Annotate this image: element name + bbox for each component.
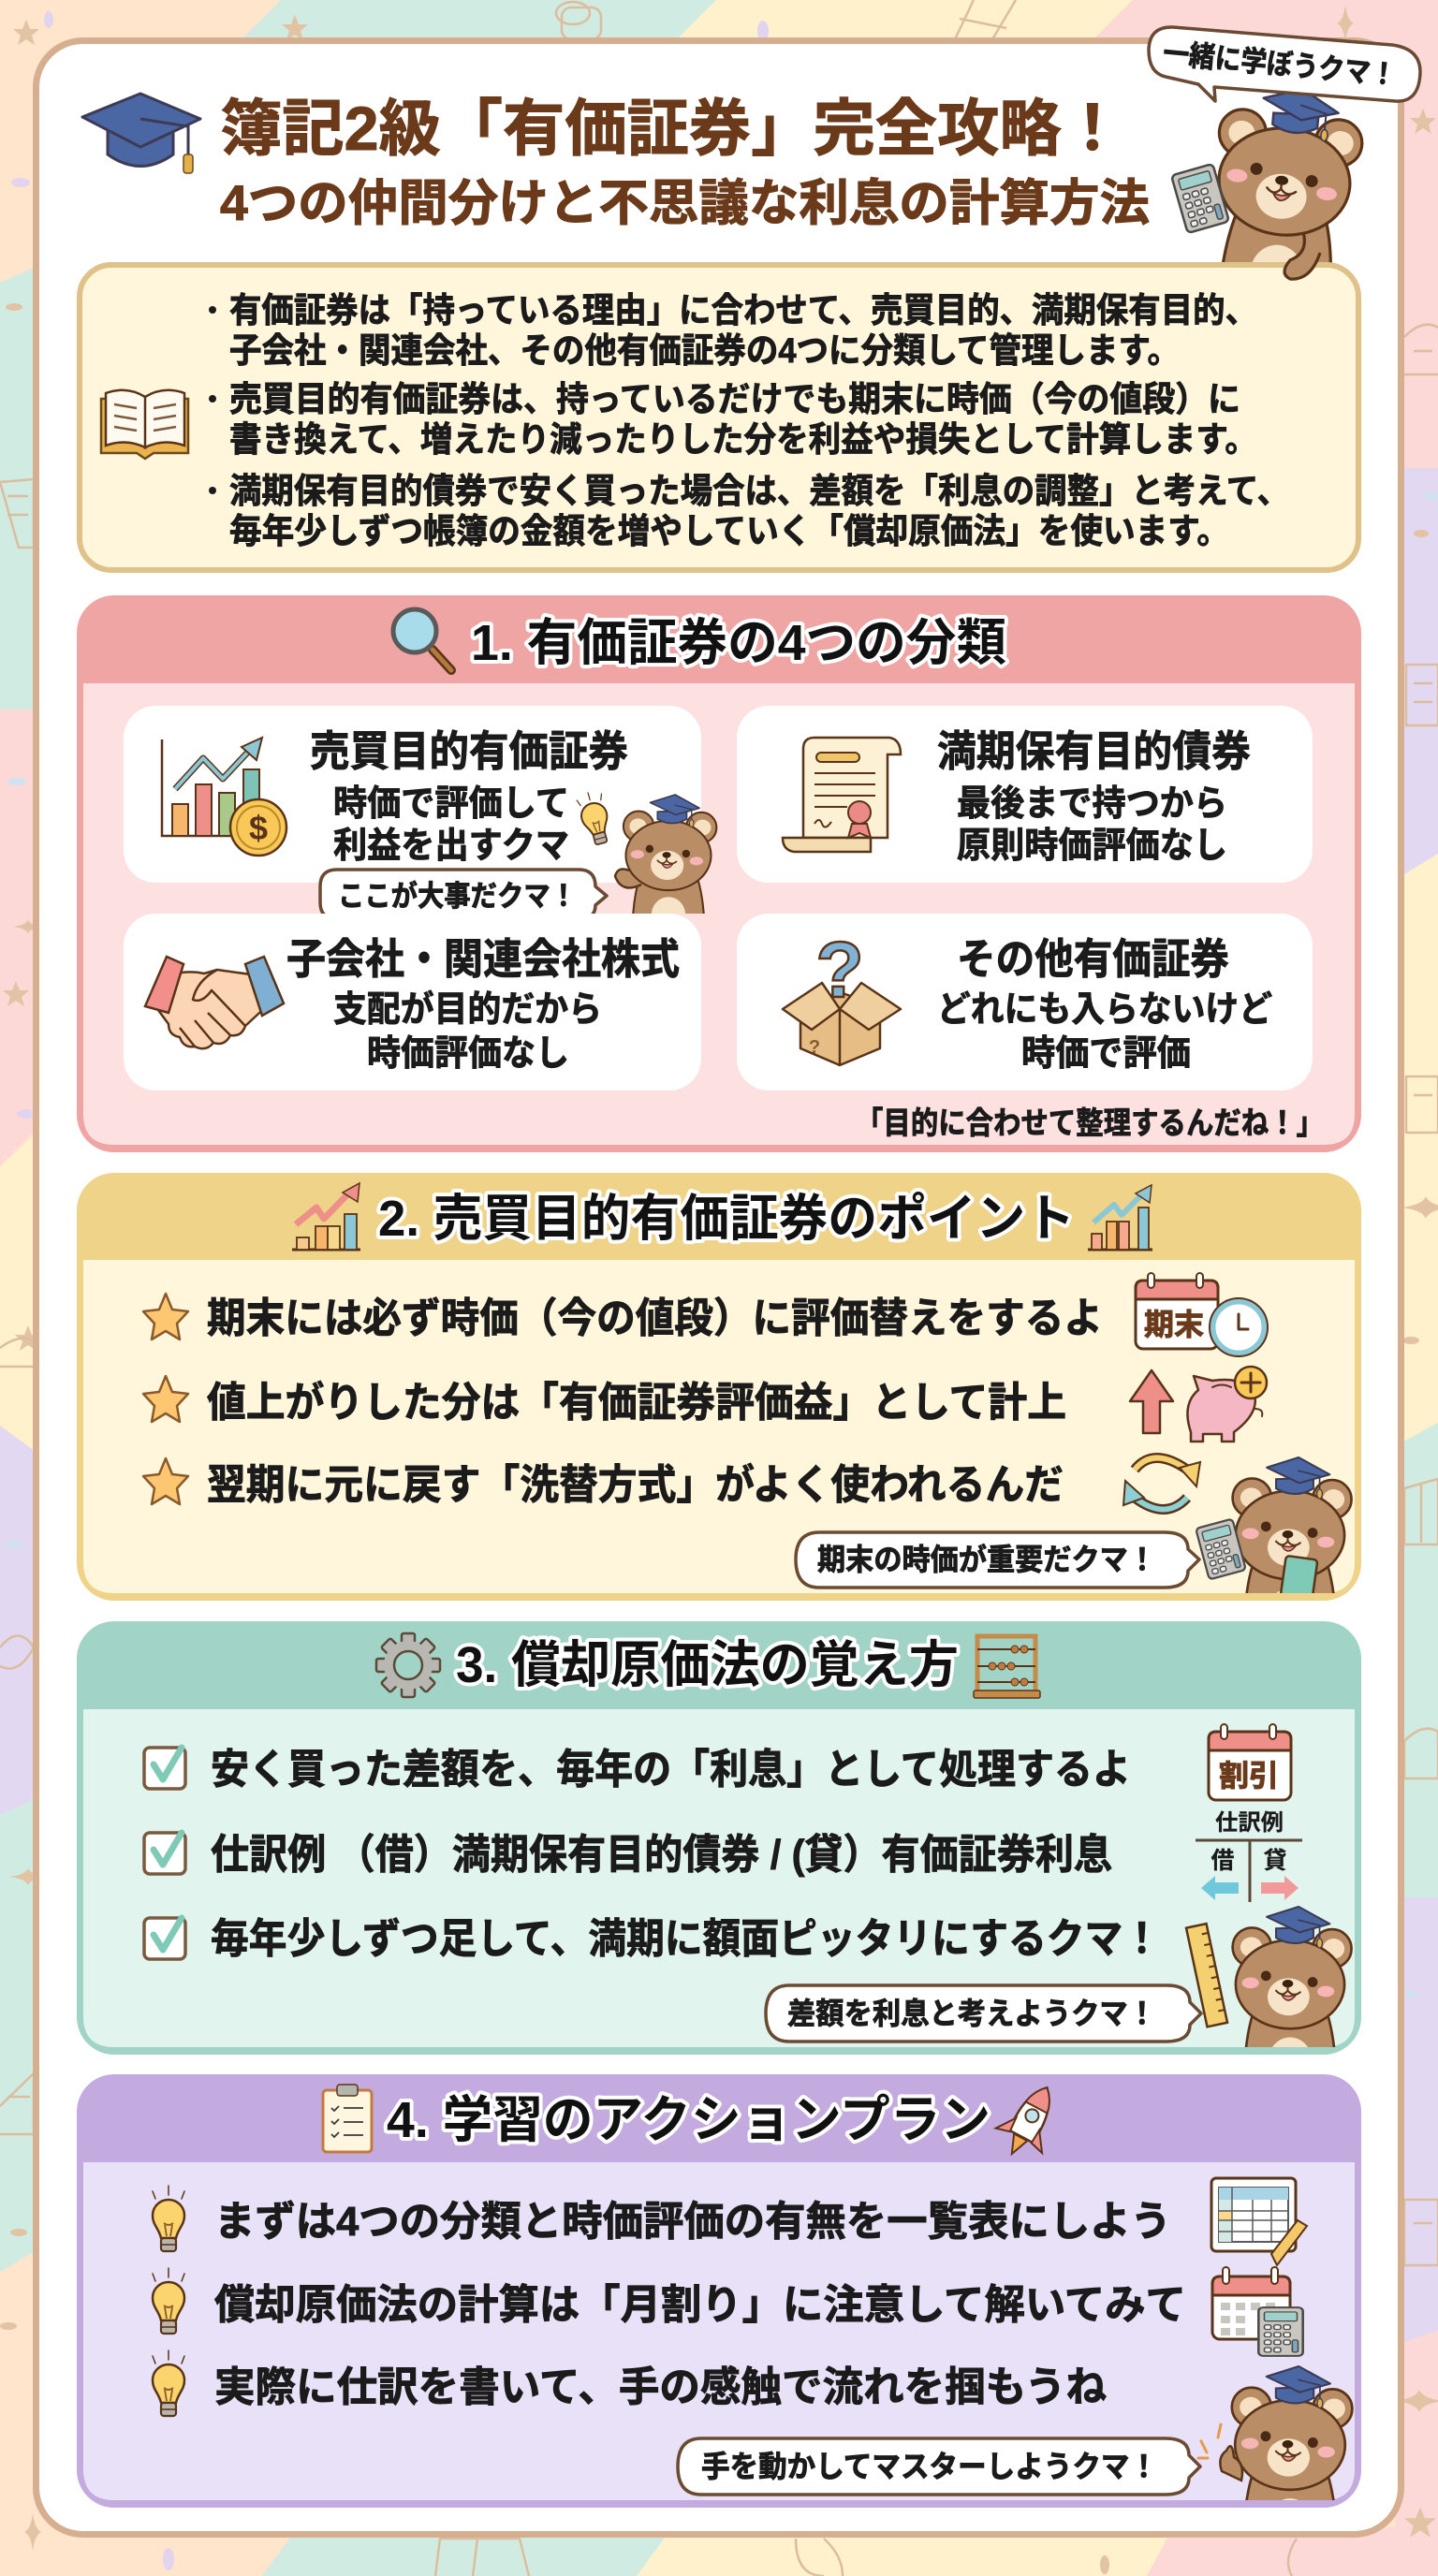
panel: intro summary <box>80 265 1358 570</box>
icon: rising chart left <box>292 1183 360 1250</box>
bear body <box>1245 2016 1335 2047</box>
icon: ruler <box>1186 1924 1227 2027</box>
icon: cycle arrows <box>1123 1458 1200 1509</box>
icon: scroll certificate <box>783 738 901 852</box>
card title: 子会社・関連会社株式 <box>286 935 680 983</box>
card text: 支配が目的だから <box>333 990 602 1030</box>
top bear body and calculator <box>1222 215 1332 262</box>
icon: rocket <box>989 2075 1070 2166</box>
t-account diagram: 仕訳例 <box>1215 1810 1284 1836</box>
bear head <box>1233 1907 1352 2028</box>
bear head <box>1233 1457 1352 1579</box>
action 2 <box>153 2268 1186 2334</box>
intro text: 毎年少しずつ帳簿の金額を増やしていく「償却原価法」を使います。 <box>229 512 1229 550</box>
section 1 heading: 1. 有価証券の4つの分類 <box>471 615 1006 671</box>
speech bubble: section 4: 手を動かしてマスターしようクマ！ <box>701 2450 1158 2483</box>
sparkle lines <box>1198 2424 1221 2458</box>
bear body <box>1245 1567 1335 1593</box>
intro text: 満期保有目的債券で安く買った場合は、差額を「利息の調整」と考えて、 <box>229 472 1289 510</box>
action 3: 実際に仕訳を書いて、手の感触で流れを掴もうね <box>214 2364 1107 2410</box>
card text: 時価評価なし <box>367 1034 569 1074</box>
icon: calendar and clock: 期末 <box>1144 1308 1204 1341</box>
icon: calendar and calculator <box>1212 2267 1303 2356</box>
icon: chart and coin: $ <box>249 809 268 847</box>
icon: mystery box: ? <box>809 1037 820 1058</box>
bear arm <box>1284 232 1320 279</box>
speech bubble: section 1: ここが大事だクマ！ <box>338 880 577 913</box>
card text: 最後まで持つから <box>957 784 1227 824</box>
icon: rising chart right <box>1088 1185 1152 1250</box>
bear body <box>1245 2477 1335 2500</box>
check item 3: 毎年少しずつ足して、満期に額面ピッタリにするクマ！ <box>211 1916 1161 1962</box>
check item 1: 安く買った差額を、毎年の「利息」として処理するよ <box>211 1747 1131 1793</box>
card: other securities <box>737 914 1313 1090</box>
section 3 heading: 3. 償却原価法の覚え方 <box>456 1637 959 1693</box>
t-account diagram: 借 <box>1211 1848 1235 1874</box>
panel: section 4 action plan <box>77 2074 1361 2508</box>
speech bubble: section 2: 期末の時価が重要だクマ！ <box>817 1543 1156 1576</box>
title line 2: 4つの仲間分けと不思議な利息の計算方法 <box>220 176 1150 231</box>
card text: 利益を出すクマ <box>333 827 569 866</box>
icon: abacus <box>974 1636 1040 1698</box>
icon: calculator <box>1171 164 1229 233</box>
icon: mystery box: ? <box>815 926 864 1014</box>
panel: section 1 classification <box>77 595 1361 1152</box>
intro text: 子会社・関連会社、その他有価証券の4つに分類して管理します。 <box>229 331 1180 370</box>
icon: handshake <box>145 957 284 1048</box>
card: trading securities <box>124 706 701 883</box>
panel: section 2 points <box>77 1173 1361 1601</box>
point 3: 翌期に元に戻す「洗替方式」がよく使われるんだ <box>207 1462 1064 1508</box>
point 2: 値上がりした分は「有価証券評価益」として計上 <box>207 1380 1066 1426</box>
title <box>220 94 1150 231</box>
mascot: section 3 bear with ruler <box>1185 1906 1353 2047</box>
t-account diagram <box>1196 1810 1302 1902</box>
bear head <box>624 795 716 890</box>
action 2: 償却原価法の計算は「月割り」に注意して解いてみて <box>214 2282 1186 2328</box>
quote: 「目的に合わせて整理するんだね！」 <box>856 1105 1324 1140</box>
section 2 heading: 2. 売買目的有価証券のポイント <box>378 1191 1075 1247</box>
icon: calculator <box>1196 1519 1246 1579</box>
card: subsidiaries <box>124 914 701 1090</box>
t-account diagram: 貸 <box>1263 1848 1287 1874</box>
action 1: まずは4つの分類と時価評価の有無を一覧表にしよう <box>214 2199 1171 2245</box>
speech bubble: section 2 <box>796 1532 1199 1588</box>
intro text: 書き換えて、増えたり減ったりした分を利益や損失として計算します。 <box>229 420 1257 459</box>
bear head <box>1232 2366 1352 2490</box>
speech bubble: section 1 <box>320 870 607 919</box>
panel: section 3 amortized cost <box>77 1621 1361 2055</box>
icon: chart and coin <box>162 738 286 856</box>
card text: 時価で評価して <box>333 784 569 824</box>
card title: 売買目的有価証券 <box>310 727 628 775</box>
card title: 満期保有目的債券 <box>937 727 1251 775</box>
icon: magnifier <box>393 609 451 670</box>
icon: light bulb <box>576 789 614 847</box>
icon: graduation cap <box>82 94 200 173</box>
mascot: section 1 bear with bulb <box>614 794 717 914</box>
card: held to maturity <box>737 706 1313 883</box>
card text: 時価で評価 <box>1021 1034 1191 1074</box>
icon: gear <box>376 1633 440 1697</box>
title line 1: 簿記2級「有価証券」完全攻略！ <box>220 94 1123 163</box>
bear arm <box>615 869 641 887</box>
point 1: 期末には必ず時価（今の値段）に評価替えをするよ <box>207 1295 1103 1341</box>
bear body <box>632 881 705 914</box>
card title: その他有価証券 <box>957 935 1229 983</box>
icon: discount calendar <box>1209 1724 1291 1800</box>
action 1 <box>153 2186 1171 2251</box>
section 4 heading: 4. 学習のアクションプラン <box>387 2092 990 2148</box>
card text: 原則時価評価なし <box>957 827 1227 866</box>
speech bubble: section 3 <box>766 1985 1201 2042</box>
icon: phone <box>1279 1555 1318 1593</box>
mascot: section 4 bear thumbs up <box>1196 2365 1354 2500</box>
speech bubble: section 3: 差額を利息と考えようクマ！ <box>787 1997 1156 2030</box>
icon: open book <box>101 390 188 459</box>
speech bubble: section 4 <box>678 2438 1200 2495</box>
speech bubble: top: 一緒に学ぼうクマ！ <box>1162 37 1398 92</box>
icon: piggy bank <box>1187 1367 1267 1442</box>
icon: up arrow <box>1130 1370 1173 1433</box>
intro text <box>209 291 1289 550</box>
card text: どれにも入らないけど <box>937 990 1272 1030</box>
icon: calendar and clock <box>1136 1273 1268 1356</box>
icon: mystery box <box>783 926 901 1065</box>
intro text: 売買目的有価証券は、持っているだけでも期末に時価（今の値段）に <box>229 380 1240 418</box>
icon: table and pencil <box>1211 2178 1307 2265</box>
intro text: 有価証券は「持っている理由」に合わせて、売買目的、満期保有目的、 <box>229 291 1257 329</box>
icon: discount calendar: 割引 <box>1219 1759 1279 1793</box>
bear thumb <box>1220 2446 1242 2481</box>
icon: clipboard <box>323 2085 372 2152</box>
mascot: top bear with calculator <box>1171 82 1366 279</box>
action 3 <box>153 2350 1107 2416</box>
mascot: section 2 bear <box>1196 1456 1353 1593</box>
check item 2: 仕訳例 （借）満期保有目的債券 / (貸）有価証券利息 <box>211 1832 1112 1878</box>
